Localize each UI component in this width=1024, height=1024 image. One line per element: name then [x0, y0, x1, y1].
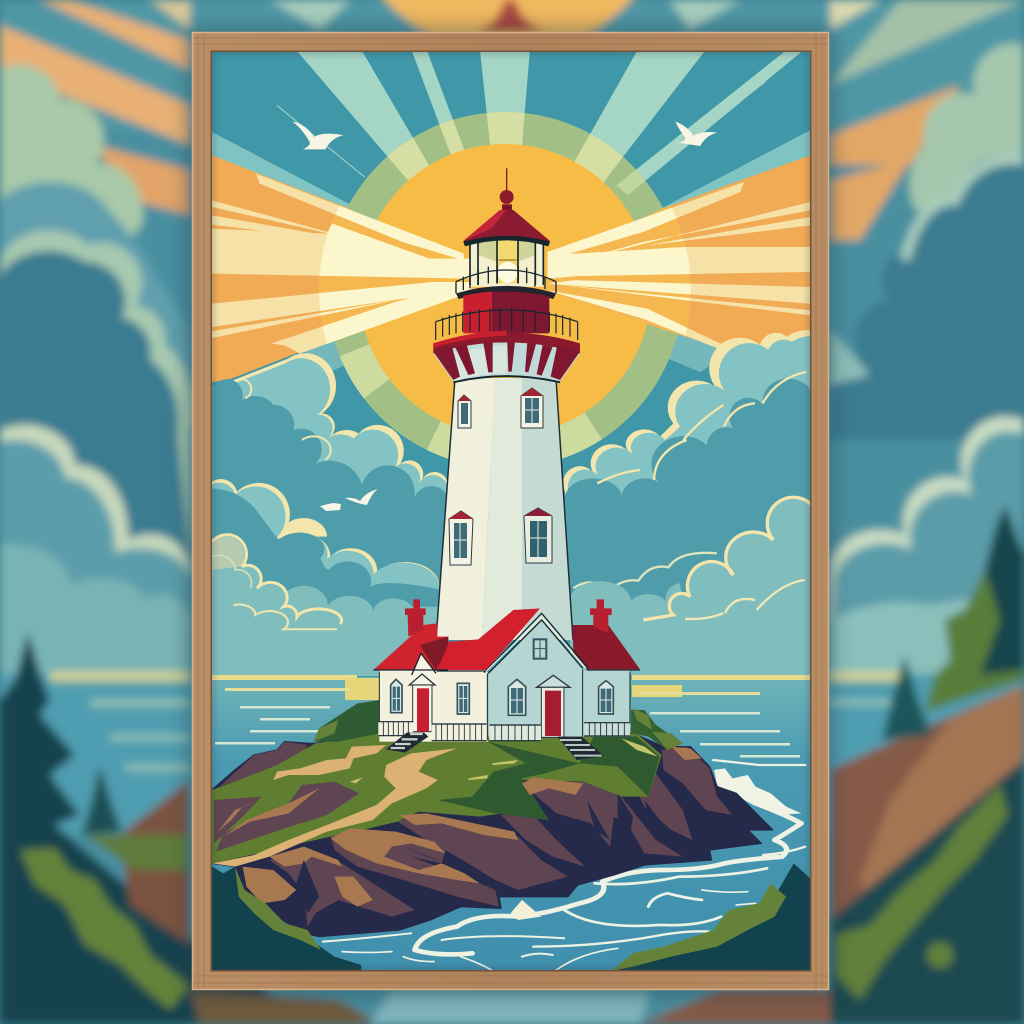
rock highlights	[243, 747, 702, 907]
poster inner edge shadow	[212, 52, 810, 970]
sky	[212, 52, 810, 682]
rocks over grass	[214, 782, 359, 852]
middle left cloud	[212, 479, 440, 592]
red drum	[463, 292, 549, 333]
lantern roof	[463, 210, 550, 246]
small gable	[412, 653, 436, 723]
purple rocks	[214, 742, 732, 927]
rock silhouette	[212, 733, 773, 937]
sun disc	[359, 144, 651, 436]
right wing wall	[583, 670, 630, 737]
tower window top left	[458, 395, 471, 428]
right steps	[557, 737, 604, 760]
inner band glow	[319, 204, 691, 336]
left steps	[386, 733, 428, 753]
house windows	[391, 679, 613, 715]
birds top	[277, 82, 765, 177]
halo ring light segments	[298, 52, 801, 490]
background sky rays	[0, 0, 1024, 240]
sea	[212, 677, 810, 970]
background clouds left	[0, 64, 194, 675]
foreground foliage left	[212, 867, 361, 972]
lantern deck	[456, 286, 556, 299]
grass top	[212, 733, 662, 863]
lantern railing	[456, 266, 556, 293]
bushes behind house	[313, 700, 380, 742]
dirt path	[212, 748, 457, 867]
background sea	[0, 672, 1024, 834]
background clouds right	[830, 44, 1024, 675]
wooden frame	[185, 26, 835, 998]
bird top right	[675, 121, 717, 146]
orange light bands	[212, 155, 810, 382]
main gable wall	[488, 620, 583, 737]
attic window	[533, 638, 547, 660]
bird top left	[292, 121, 344, 149]
light sky rays	[212, 52, 810, 212]
lower sky light wedges	[304, 334, 717, 372]
gallery railing	[436, 308, 578, 340]
keeper's house	[373, 599, 640, 760]
tower body	[436, 378, 573, 640]
sun halo ring	[327, 112, 683, 468]
tower window top right	[521, 388, 543, 428]
clouds right	[563, 330, 813, 683]
light beams inner	[319, 206, 691, 344]
water swirls	[323, 760, 805, 970]
wave splash	[714, 768, 801, 815]
left door	[409, 674, 435, 732]
lower right cloud	[643, 497, 813, 683]
horizon glow and water streaks	[212, 675, 810, 758]
low horizon sky right	[570, 581, 681, 676]
tower window lower left	[449, 511, 473, 565]
gallery balcony	[433, 331, 580, 382]
bird small left	[320, 503, 341, 511]
upper left cloud	[212, 353, 447, 584]
clouds left	[212, 330, 813, 683]
right roof	[573, 625, 640, 669]
background bottom water	[370, 992, 650, 1024]
rocky island	[212, 700, 812, 972]
left roof	[373, 623, 448, 670]
porch fences	[378, 722, 630, 741]
right door	[537, 675, 570, 737]
thin right clouds	[573, 553, 717, 590]
light beams outer	[212, 174, 810, 354]
background trees and rocks left	[0, 632, 380, 1024]
dark rock cracks	[296, 793, 667, 913]
tower collar line	[453, 376, 560, 382]
lantern room and gallery	[433, 168, 580, 382]
foreground foliage right	[610, 863, 812, 972]
chimneys	[405, 599, 612, 637]
left wing wall	[379, 670, 488, 742]
lower left cloud	[212, 533, 344, 630]
background trees and rocks right	[640, 505, 1024, 1024]
corbels	[433, 342, 580, 380]
main roof	[437, 608, 540, 673]
low horizon sky	[287, 586, 438, 676]
gable trim	[373, 613, 640, 675]
upper right cloud	[563, 330, 810, 652]
poster artwork	[212, 52, 813, 972]
dark grass shadows	[438, 735, 660, 820]
small birds	[320, 489, 378, 511]
bird small right	[345, 489, 378, 505]
spire and finial	[500, 168, 514, 210]
tower window lower right	[524, 508, 552, 563]
lantern glass	[470, 238, 543, 287]
